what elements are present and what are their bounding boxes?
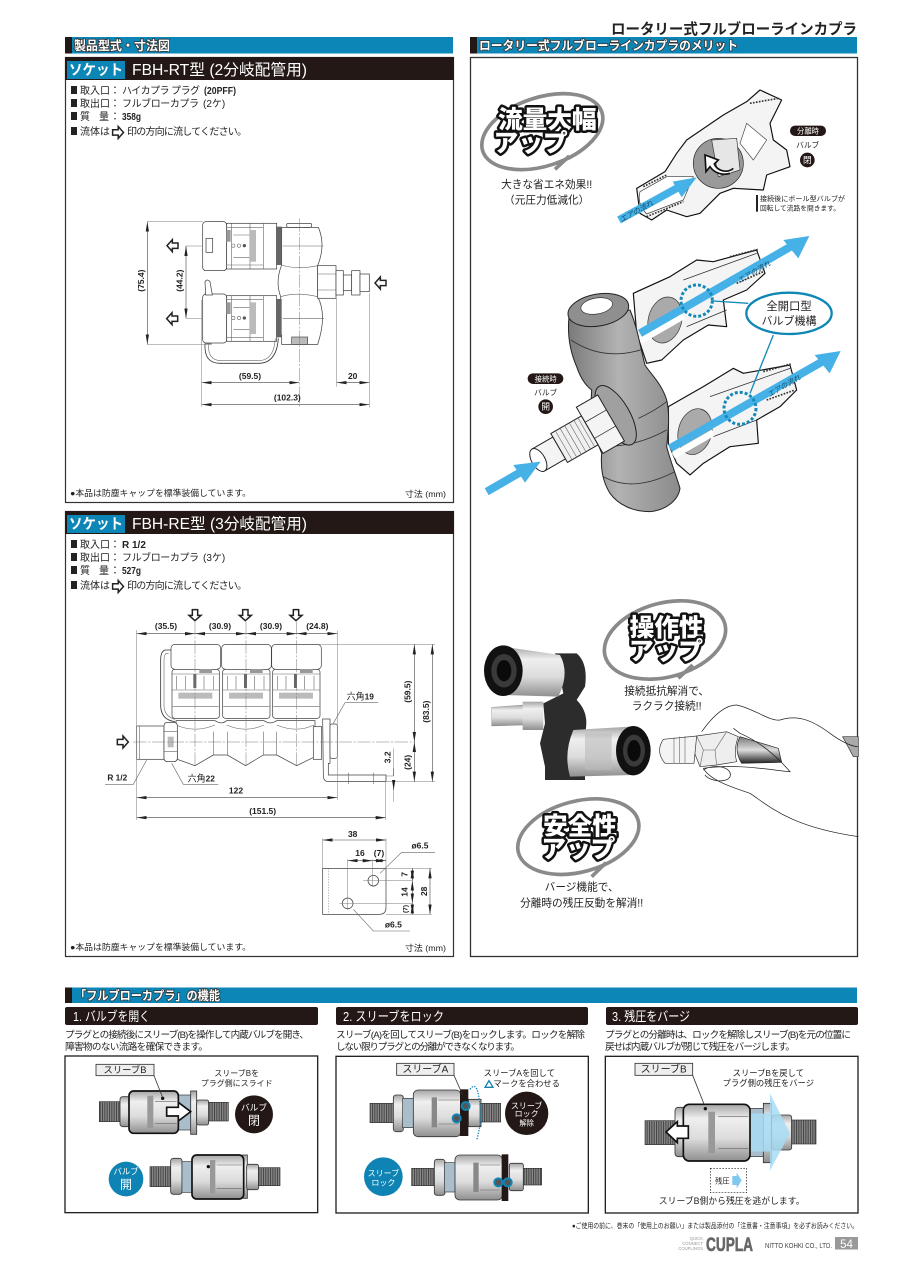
badge: sleeve locked: スリーブ (368, 1168, 399, 1178)
section header: product models and dimensions (65, 37, 453, 54)
alignment marks (453, 1102, 470, 1122)
spec list: FBH-RE: 527g (122, 566, 141, 577)
technical drawing: FBH-RT (136, 218, 386, 407)
badge: sleeve lock released (505, 1092, 548, 1135)
coupler open (150, 1155, 280, 1199)
badge: connected valve open (528, 373, 563, 414)
page number: 54 (840, 1239, 853, 1251)
coupler locked (412, 1154, 542, 1201)
text: energy saving (501, 178, 592, 206)
page title: ロータリー式フルブローラインカプラ (611, 20, 857, 38)
panel header: FBH-RE (65, 511, 454, 534)
dimensions along top: (30.9) (209, 621, 231, 631)
spec list: FBH-RT: ： (110, 112, 120, 123)
step 1 header: 1. バルブを開く (73, 1009, 150, 1024)
dimensions at right: 3.2 (382, 751, 392, 763)
label: sleeve A: スリーブA (402, 1063, 449, 1076)
dimension: 44.2 (174, 246, 186, 318)
page number (835, 1237, 858, 1251)
logo: CUPLA: CUPLA (706, 1235, 753, 1256)
slide note: スリーブBを (214, 1068, 259, 1078)
arrow: air flow closed (618, 177, 697, 224)
label: sleeve B: スリーブB (641, 1063, 687, 1076)
badge: flow rate: 流量大幅 (498, 106, 597, 134)
text: purge function (520, 881, 643, 910)
panel header: FBH-RE: FBH-RE型 (3分岐配管用) (132, 515, 307, 533)
text: purge function: 分離時の残圧反動を解消!! (520, 897, 643, 910)
legend: residual pressure (710, 1168, 747, 1193)
illustration: manifold with cutaway couplers (487, 236, 841, 512)
spec list: FBH-RE: 量 (99, 565, 109, 577)
step 2 description (336, 1029, 585, 1053)
badge: flow rate: アップ (494, 129, 568, 157)
dimensions at right (382, 644, 432, 790)
section header: full blow coupler functions: 「フルブローカプラ」の機能 (75, 988, 220, 1003)
text: easy connection: 接続抵抗解消で、 (624, 684, 709, 697)
dimensions along bottom: 122 (229, 786, 243, 796)
dotted rings (681, 285, 756, 424)
rotate note: マークを合わせる (493, 1078, 560, 1088)
spec list: FBH-RE: ： (110, 566, 120, 577)
lower air arrow: エアの流れ (766, 373, 803, 399)
step 3 diagram (605, 1056, 858, 1213)
dimension: 20 (337, 371, 369, 383)
illustration: hand with plug (660, 705, 858, 837)
upper cutaway (633, 249, 765, 363)
coupler closed (99, 1091, 228, 1134)
dimension: 102.3: (102.3) (274, 393, 301, 403)
spec list: FBH-RT: 質 (80, 110, 90, 123)
spec list: FBH-RT: ハイカプラ プラグ (122, 84, 200, 97)
step 2 description: しない限りプラグとの分離ができなくなります。 (336, 1041, 520, 1053)
step 3 description: 戻せば内蔵バルブが閉じて残圧をバージします。 (605, 1041, 795, 1053)
section header: merits: ロータリー式フルブローラインカプラのメリット (479, 38, 738, 53)
badge: flow rate (472, 80, 613, 184)
dimensions at right: (83.5) (421, 700, 431, 723)
dimensions along bottom: (151.5) (249, 806, 276, 816)
badge: operability: アップ (629, 637, 703, 665)
upper air arrow (640, 236, 809, 341)
panel header: FBH-RT: FBH-RT型 (2分岐配管用) (132, 61, 307, 79)
spec list: FBH-RT: ： (110, 99, 120, 110)
arrow: air flow closed: エアの流れ (618, 198, 655, 224)
text: purge function: バージ機能で、 (545, 881, 619, 894)
rotate note (484, 1068, 560, 1088)
slide note (201, 1068, 273, 1088)
light blue purge arrow (750, 1093, 790, 1171)
badge: valve closed (235, 1095, 273, 1133)
logo: CUPLA: COUPLINGS (678, 1246, 703, 1251)
manifold body (565, 289, 680, 512)
badge: valve closed: バルブ (241, 1101, 267, 1112)
arrow: slide (167, 1102, 191, 1121)
badge: sleeve lock released: ロック (515, 1110, 539, 1119)
arrow: return (666, 1122, 688, 1143)
spec list: FBH-RT: 取入口 (80, 86, 110, 97)
unit: FBH-RE: 寸法 (mm) (405, 943, 446, 953)
unit: FBH-RT: 寸法 (mm) (405, 489, 446, 499)
leader labels: 六角19 (347, 690, 374, 701)
plug (516, 379, 644, 492)
step 2 header: 2. スリーブをロック (343, 1009, 444, 1024)
badge: operability (596, 588, 734, 692)
dimensions along bottom (137, 786, 386, 818)
spec list: FBH-RT (71, 84, 247, 138)
label: sleeve B: スリーブB (104, 1064, 146, 1075)
bracket drawing: 7 (400, 872, 410, 877)
flow arrows (167, 240, 386, 325)
callout: full-bore valve: 全開口型 (766, 299, 812, 313)
badge: sleeve lock released: スリーブ (511, 1100, 542, 1110)
spec list: FBH-RT: (20PFF) (204, 86, 236, 97)
badge: connected valve open: 接続時 (535, 374, 557, 383)
spec list: FBH-RT: 358g (122, 112, 141, 123)
note: ball valve (756, 194, 845, 213)
rotate note: スリーブAを回して (484, 1068, 555, 1078)
spec list: FBH-RE: 流体は (80, 580, 110, 592)
callout: full-bore valve (713, 293, 832, 393)
dimension: 75.4 (136, 222, 147, 344)
dimension: 75.4: (75.4) (136, 269, 146, 292)
bracket drawing: 14 (400, 887, 410, 897)
technical drawing: FBH-RE (105, 610, 435, 820)
spec list: FBH-RT: (2ケ) (203, 98, 225, 110)
label: sleeve B (635, 1063, 704, 1104)
step 1 description (65, 1029, 309, 1053)
slide note: プラグ側にスライド (201, 1078, 273, 1088)
spec list: FBH-RT: 印の方向に流してください。 (127, 125, 247, 138)
step 1 diagram (65, 1056, 318, 1213)
spec list: FBH-RE (71, 540, 247, 592)
logo: CUPLA (678, 1235, 753, 1256)
company name: NITTO KOHKI CO., LTD. (765, 1243, 832, 1250)
spec list: FBH-RE: (3ケ) (203, 552, 225, 564)
dimensions along top: (30.9) (260, 621, 282, 631)
badge: valve open: バルブ (113, 1166, 139, 1176)
leader labels: R 1/2 (107, 773, 128, 783)
bracket drawing (323, 829, 435, 931)
purge note (723, 1068, 814, 1088)
badge: disconnected valve closed: バルブ (796, 139, 819, 149)
badge: safety (509, 786, 647, 887)
badge: sleeve lock released: 解除 (519, 1118, 535, 1127)
dotted rotation arrow (470, 1086, 481, 1140)
dimensions along top: (35.5) (155, 621, 177, 631)
step 3 header (606, 1007, 858, 1025)
note: FBH-RE: ●本品は防塵キャップを標準装備しています。 (70, 942, 251, 952)
spec list: FBH-RE: フルブローカプラ (122, 551, 199, 564)
flow arrows (117, 610, 302, 748)
badge: safety: アップ (541, 836, 616, 864)
dimensions at right: (24) (403, 755, 413, 770)
coupler purge (645, 1103, 816, 1163)
badge: disconnected valve closed (790, 126, 826, 167)
spec list: FBH-RE: 質 (80, 564, 90, 577)
panel: FBH-RE socket (65, 511, 454, 956)
dimension: 59.5: (59.5) (239, 371, 261, 381)
label: sleeve B (96, 1064, 163, 1098)
step 3 description (605, 1029, 851, 1053)
footer notice: ●ご使用の前に、巻末の「使用上のお願い」または製品添付の「注意書・注意事項」を必ずお読みください。 (572, 1221, 858, 1230)
note: FBH-RT: ●本品は防塵キャップを標準装備しています。 (70, 488, 251, 498)
spec list: FBH-RT: 流体は (80, 126, 110, 138)
bracket drawing: 16 (355, 848, 365, 858)
badge: sleeve locked: ロック (371, 1178, 395, 1187)
leader labels: 六角22 (188, 772, 215, 783)
badge: disconnected valve closed: 閉 (803, 155, 812, 165)
section header: product models and dimensions: 製品型式・寸法図 (74, 38, 170, 53)
text: energy saving: 大きな省エネ効果!! (501, 178, 592, 191)
callout: full-bore valve: バルブ機構 (762, 314, 816, 328)
lower cutaway (668, 364, 797, 475)
merit: operability and safety (484, 588, 858, 910)
step 2: lock sleeve (336, 1007, 588, 1213)
badge: valve open (109, 1162, 143, 1196)
badge: valve open: 開 (120, 1178, 132, 1192)
badge: disconnected valve closed: 分離時 (797, 127, 820, 136)
step 1 description: プラグとの接続後にスリーブ(B)を操作して内蔵バルブを開き、 (65, 1029, 309, 1041)
spec list: FBH-RE: 取入口 (80, 540, 110, 551)
bracket drawing: (7) (403, 905, 410, 913)
step 2 description: スリーブ(A)を回してスリーブ(B)をロックします。ロックを解除 (336, 1029, 585, 1041)
label: sleeve A (397, 1063, 463, 1095)
badge: valve closed: 閉 (248, 1113, 260, 1127)
dimension: 59.5 (202, 371, 299, 383)
panel header: FBH-RT (65, 57, 454, 80)
section header: full blow coupler functions (65, 988, 857, 1003)
cutaway: valve closed (637, 90, 790, 220)
step 1: open valve (65, 1007, 318, 1213)
merit: flow rate up (472, 80, 845, 224)
spec list: FBH-RT: 量 (99, 111, 109, 123)
leader labels (105, 690, 378, 784)
purge note: スリーブBを戻して (733, 1068, 804, 1078)
dimensions along top: (24.8) (306, 621, 329, 631)
spec list: FBH-RT: フルブローカプラ (122, 97, 199, 110)
panel header: FBH-RT: ソケット (69, 62, 123, 79)
bracket drawing: 28 (419, 886, 429, 896)
step 1 description: 障害物のない流路を確保できます。 (65, 1041, 208, 1053)
bracket drawing: ø6.5 (412, 841, 429, 851)
note: ball valve: 接続後にボール型バルブが (760, 194, 845, 203)
sleeve B body (683, 1104, 750, 1161)
step 1 header (65, 1007, 318, 1025)
coupler unlocked (370, 1089, 501, 1137)
step 2 diagram (336, 1056, 588, 1213)
spec list: FBH-RE: ： (110, 553, 120, 564)
dimension: 20: 20 (348, 371, 358, 381)
logo: CUPLA: CONNECT (682, 1241, 703, 1246)
step 3 header: 3. 残圧をバージ (612, 1009, 690, 1024)
spec list: FBH-RE: 取出口 (80, 552, 110, 564)
badge: operability: 操作性 (630, 614, 704, 642)
panel header: FBH-RE: ソケット (69, 516, 123, 533)
legend: residual pressure: 残圧 (715, 1176, 730, 1185)
step 3: purge residual pressure (605, 1007, 858, 1213)
bracket drawing: ø6.5 (385, 920, 402, 930)
caption: スリーブB側から残圧を逃がします。 (659, 1195, 805, 1206)
bracket drawing: 38 (348, 829, 358, 839)
step 3 description: プラグとの分離時は、ロックを解除しスリーブ(B)を元の位置に (605, 1029, 851, 1041)
logo: CUPLA: QUICK (690, 1236, 703, 1241)
alignment marks locked (494, 1178, 512, 1186)
spec list: FBH-RE: 印の方向に流してください。 (127, 579, 247, 592)
spec list: FBH-RE: ： (110, 540, 120, 551)
photo: manifold with couplers (484, 645, 651, 780)
dimensions at right: (59.5) (403, 680, 413, 703)
text: easy connection (624, 684, 709, 712)
spec list: FBH-RT: ： (110, 86, 120, 97)
panel: merits (470, 58, 858, 956)
note: ball valve: 回転して流路を開きます。 (760, 204, 840, 213)
dimensions along top (137, 621, 337, 634)
text: easy connection: ラクラク接続!! (632, 699, 702, 712)
purge note: プラグ側の残圧をバージ (723, 1078, 814, 1088)
panel: FBH-RT socket (65, 57, 454, 502)
lower air arrow (670, 351, 841, 456)
badge: safety: 安全性 (543, 812, 617, 840)
text: energy saving: （元圧力低減化） (504, 193, 589, 206)
inlet arrow (487, 462, 541, 492)
section header: merits (470, 37, 857, 54)
badge: connected valve open: バルブ (534, 387, 557, 397)
spec list: FBH-RE: R 1/2 (122, 540, 146, 551)
spec list: FBH-RT: 取出口 (80, 98, 110, 110)
step 2 header (336, 1007, 588, 1025)
upper air arrow: エアの流れ (736, 259, 773, 285)
badge: sleeve locked (364, 1157, 403, 1196)
bracket drawing: (7) (374, 848, 384, 858)
badge: connected valve open: 開 (541, 402, 550, 412)
dimension: 44.2: (44.2) (174, 269, 184, 292)
